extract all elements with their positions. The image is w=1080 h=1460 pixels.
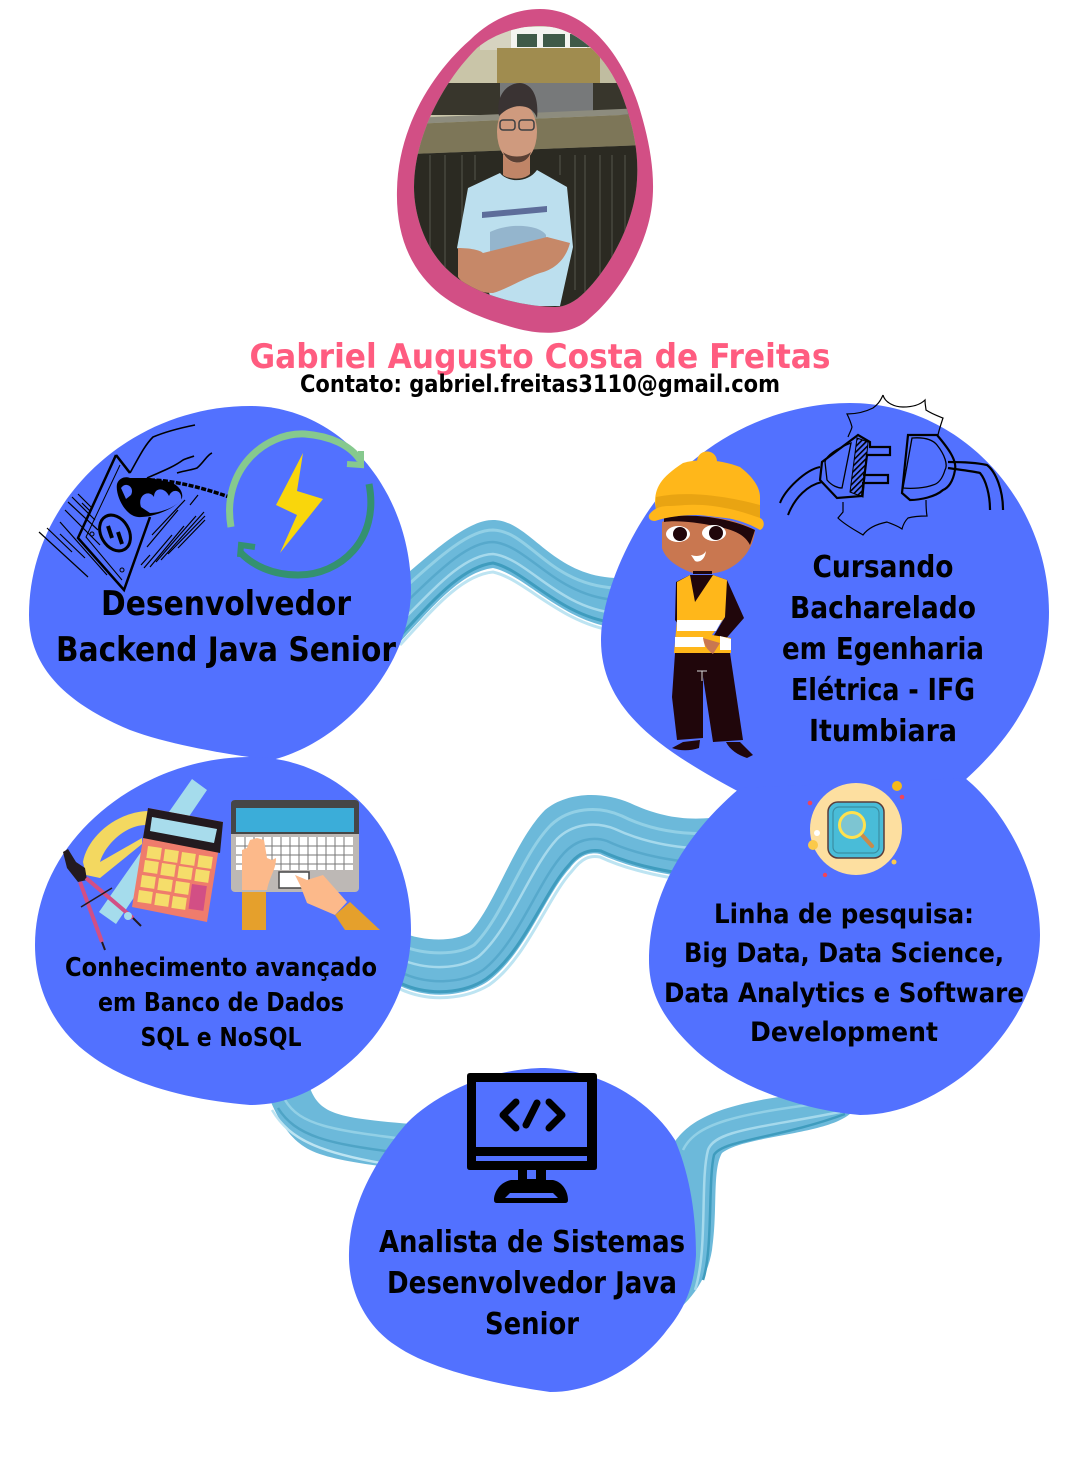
man: neck and head <box>503 155 530 179</box>
icon: code monitor <box>467 1073 597 1203</box>
heading: backend developer: Backend Java Senior <box>56 630 396 670</box>
panel: backend developer <box>29 406 411 760</box>
worker: trousers and shoes <box>672 653 743 742</box>
contact line: Contato: gabriel.freitas3110@gmail.com <box>300 370 780 398</box>
connector: brush ribbon middle <box>400 795 730 998</box>
heading: engineering degree <box>782 550 984 749</box>
man: shirt <box>457 170 573 306</box>
heading: engineering degree: em Egenharia <box>782 632 984 667</box>
icon: unplugged plug line art <box>780 395 1003 535</box>
heading: research line: Data Analytics e Software <box>664 978 1024 1009</box>
icon: hands typing on laptop <box>231 800 380 930</box>
heading: engineering degree: Elétrica - IFG <box>791 673 975 708</box>
icon: search magnifier badge <box>808 781 904 877</box>
heading: databases: em Banco de Dados <box>98 988 344 1018</box>
heading: databases <box>65 953 377 1053</box>
worker: helmet <box>697 452 717 462</box>
connector: brush ribbon lower left <box>268 1088 412 1170</box>
heading: research line: Linha de pesquisa: <box>714 899 974 930</box>
panel: systems analyst <box>349 1068 696 1392</box>
heading: research line: Development <box>750 1017 938 1048</box>
profile photo with pink frame <box>397 9 653 333</box>
worker: head <box>662 516 755 574</box>
heading: engineering degree: Cursando <box>812 550 954 585</box>
icon: hand unplugging outlet <box>39 425 232 590</box>
worker: vest <box>674 575 731 653</box>
heading: systems analyst: Analista de Sistemas <box>379 1225 685 1260</box>
man: arms <box>458 237 570 293</box>
heading: systems analyst: Senior <box>485 1307 579 1342</box>
connector: brush ribbon top <box>400 520 615 645</box>
heading: systems analyst: Desenvolvedor Java <box>387 1266 677 1301</box>
heading: research line: Big Data, Data Science, <box>684 938 1004 969</box>
panel: research line <box>649 778 1040 1115</box>
title: name: Gabriel Augusto Costa de Freitas <box>250 337 830 376</box>
heading: engineering degree: Bacharelado <box>790 591 976 626</box>
panel: databases <box>35 757 411 1105</box>
heading: backend developer <box>56 584 396 670</box>
icon: energy cycle with lightning <box>230 434 371 575</box>
panel: engineering degree <box>601 403 1049 795</box>
illustration: worker with yellow helmet <box>649 452 764 758</box>
heading: engineering degree: Itumbiara <box>809 714 957 749</box>
heading: research line <box>664 899 1024 1048</box>
heading: databases: Conhecimento avançado <box>65 953 377 983</box>
heading: systems analyst <box>379 1225 685 1342</box>
worker: dark shirt and arm <box>675 575 744 642</box>
heading: backend developer: Desenvolvedor <box>101 584 351 624</box>
connector: brush ribbon lower right <box>670 1090 852 1308</box>
heading: databases: SQL e NoSQL <box>140 1023 302 1053</box>
icon: math tools and calculator <box>63 779 223 950</box>
